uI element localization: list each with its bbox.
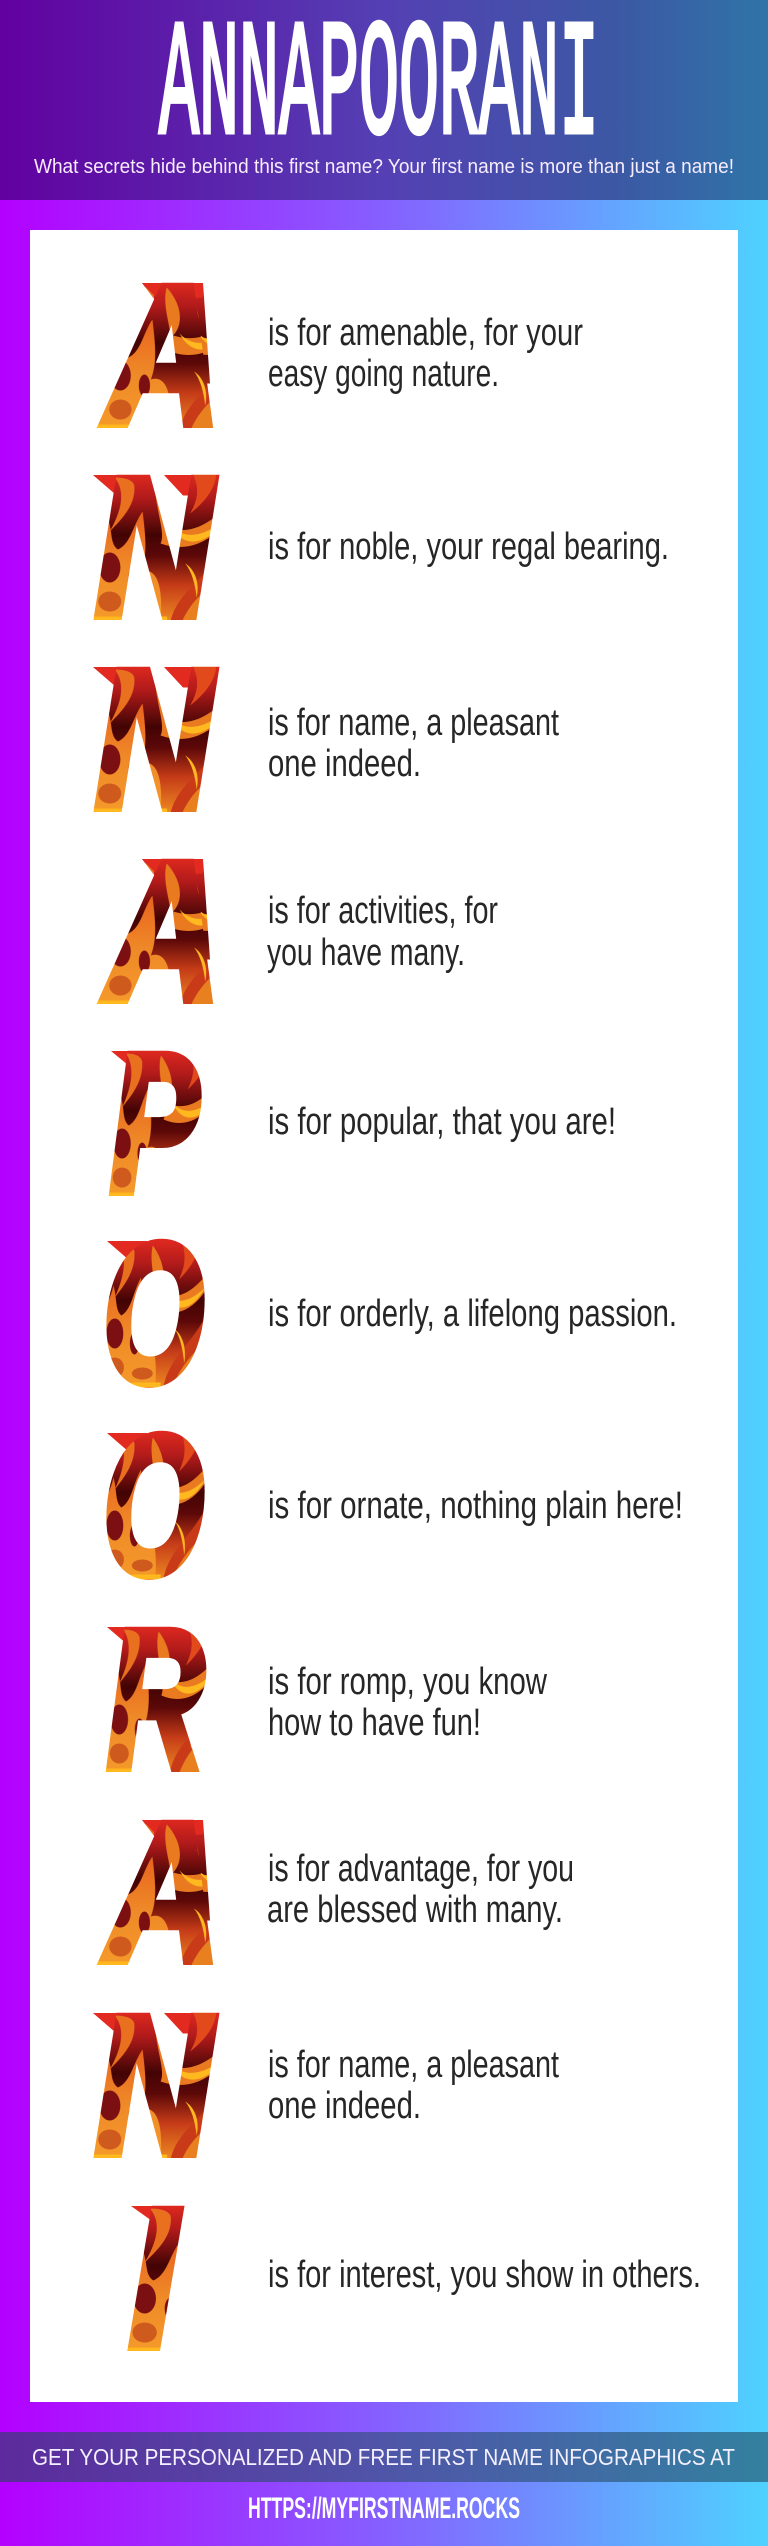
text: P meaning: is for popular, that you are! — [268, 1101, 616, 1143]
icon: flame letter O: O — [103, 1203, 204, 1424]
text: A meaning: easy going nature. — [268, 353, 499, 395]
subtitle: What secrets hide behind this first name? Your first name is more than just a name! — [34, 156, 734, 178]
text: N meaning — [268, 702, 559, 785]
text: A meaning — [268, 312, 583, 395]
text: A meaning: are blessed with many. — [267, 1889, 563, 1931]
icon: flame letter N: N — [95, 629, 215, 850]
row: I interest — [129, 2168, 701, 2389]
text: N meaning: is for name, a pleasant — [268, 702, 559, 744]
panel: white letter list — [30, 230, 738, 2402]
row: A advantage — [102, 1782, 574, 2002]
text: N meaning — [268, 2044, 559, 2127]
text: N meaning: is for name, a pleasant — [268, 2044, 559, 2086]
icon: flame letter P: P — [110, 1012, 199, 1234]
footer band — [0, 2432, 768, 2482]
text: A meaning: is for activities, for — [268, 890, 498, 932]
text: R meaning: how to have fun! — [268, 1702, 481, 1744]
row: R romp — [107, 1589, 547, 1810]
text: N meaning: one indeed. — [268, 2085, 421, 2127]
icon: flame letter I: I — [129, 2168, 180, 2389]
icon: flame letter N: N — [95, 1975, 215, 2196]
icon: flame letter A: A — [102, 1782, 220, 2002]
text: A meaning: is for advantage, for you — [268, 1848, 574, 1890]
icon: flame letter A: A — [102, 821, 220, 1041]
row: O orderly — [103, 1203, 677, 1424]
header band — [0, 0, 768, 200]
row: N noble — [93, 437, 669, 658]
text: A meaning — [267, 1848, 574, 1931]
icon: flame letter R: R — [107, 1589, 204, 1810]
text: A meaning: you have many. — [267, 932, 465, 974]
row: N name — [93, 629, 559, 850]
row: P popular — [110, 1012, 616, 1234]
row: O ornate — [103, 1395, 683, 1616]
text: R meaning: is for romp, you know — [268, 1661, 547, 1703]
footer url: HTTPS://MYFIRSTNAME.ROCKS — [248, 2492, 520, 2525]
text: A meaning — [267, 890, 498, 974]
icon: flame letter A: A — [102, 245, 220, 465]
row: N name — [93, 1975, 559, 2196]
text: R meaning — [268, 1661, 547, 1744]
icon: flame letter O: O — [103, 1395, 204, 1616]
icon: flame letter N: N — [95, 437, 215, 658]
text: N meaning: one indeed. — [268, 743, 421, 785]
row: A amenable — [102, 245, 583, 465]
text: A meaning: is for amenable, for your — [268, 312, 583, 354]
row: A activities — [102, 821, 498, 1041]
